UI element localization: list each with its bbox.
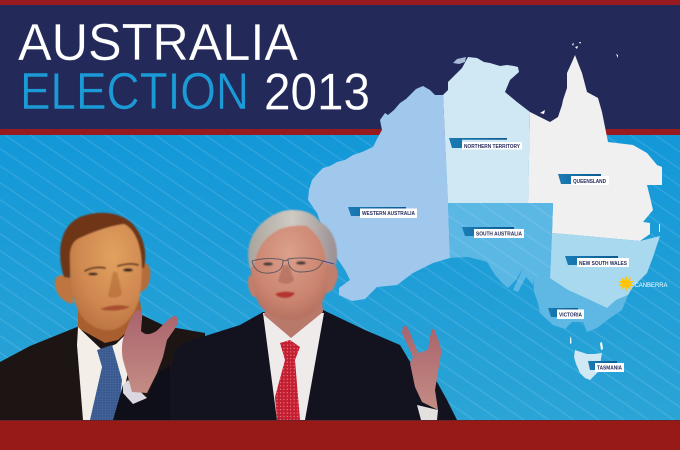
suit jacket [158,310,457,420]
eyes [263,261,306,266]
left hand [122,310,178,393]
state: Victoria [533,275,628,332]
background: striped blue ocean [0,135,680,420]
Canberra marker [618,275,668,292]
neck [264,300,323,338]
suit [0,315,205,420]
islands [453,42,660,350]
label: Northern Territory [449,138,522,150]
left cuff [123,380,147,404]
stripes over South Australia [448,203,552,284]
shirt [263,313,324,420]
hair [60,213,145,278]
neck [78,300,142,343]
label: Queensland [558,174,609,185]
nose [278,265,294,284]
mouth [100,305,130,311]
eyes [88,268,133,276]
label: Northern Territory: NORTHERN TERRITORY [464,144,520,150]
nose [108,272,122,298]
right hand [402,326,441,410]
hair [248,210,337,268]
head [250,218,328,320]
state: Tasmania [574,350,602,380]
state: Northern Territory [443,57,530,203]
header band [0,0,680,135]
title [18,13,370,120]
label: Western Australia [348,207,417,218]
title line: 2013: 2013 [264,62,370,120]
label: South Australia [462,227,524,238]
head and features [248,210,338,320]
label: Victoria: VICTORIA [559,312,582,318]
label: Tasmania [588,361,624,372]
label: Western Australia: WESTERN AUSTRALIA [362,211,415,217]
right cuff [417,405,438,420]
label: New South Wales: NEW SOUTH WALES [579,261,627,267]
icon: yellow star [618,275,634,292]
map of Australia [308,42,662,380]
title line: Australia: AUSTRALIA [18,13,299,71]
right ear [140,263,150,292]
photo: left politician [0,213,205,420]
state: Western Australia [308,86,450,301]
label: New South Wales [565,256,629,267]
label: Tasmania: TASMANIA [597,366,622,372]
right ear [324,264,338,293]
state: South Australia [448,203,553,292]
shirt [77,318,142,420]
mouth [275,292,295,298]
left ear [55,275,73,304]
label: Victoria [548,308,584,319]
head and features [55,213,150,330]
left ear [248,275,258,298]
label: Canberra: CANBERRA [634,282,668,289]
tie [275,340,300,420]
label: Queensland: QUEENSLAND [573,179,606,185]
brows [85,264,138,271]
state: New South Wales [550,233,660,308]
tie [90,345,122,420]
photo: right politician [113,210,457,420]
label: South Australia: SOUTH AUSTRALIA [476,232,522,238]
glasses [252,258,334,273]
footer shadow line [0,420,680,421]
title line: Election: ELECTION [20,62,249,120]
left sleeve [113,365,170,420]
head [70,224,142,330]
footer band [0,420,680,450]
map labels [348,138,629,372]
state: Queensland [528,55,662,241]
